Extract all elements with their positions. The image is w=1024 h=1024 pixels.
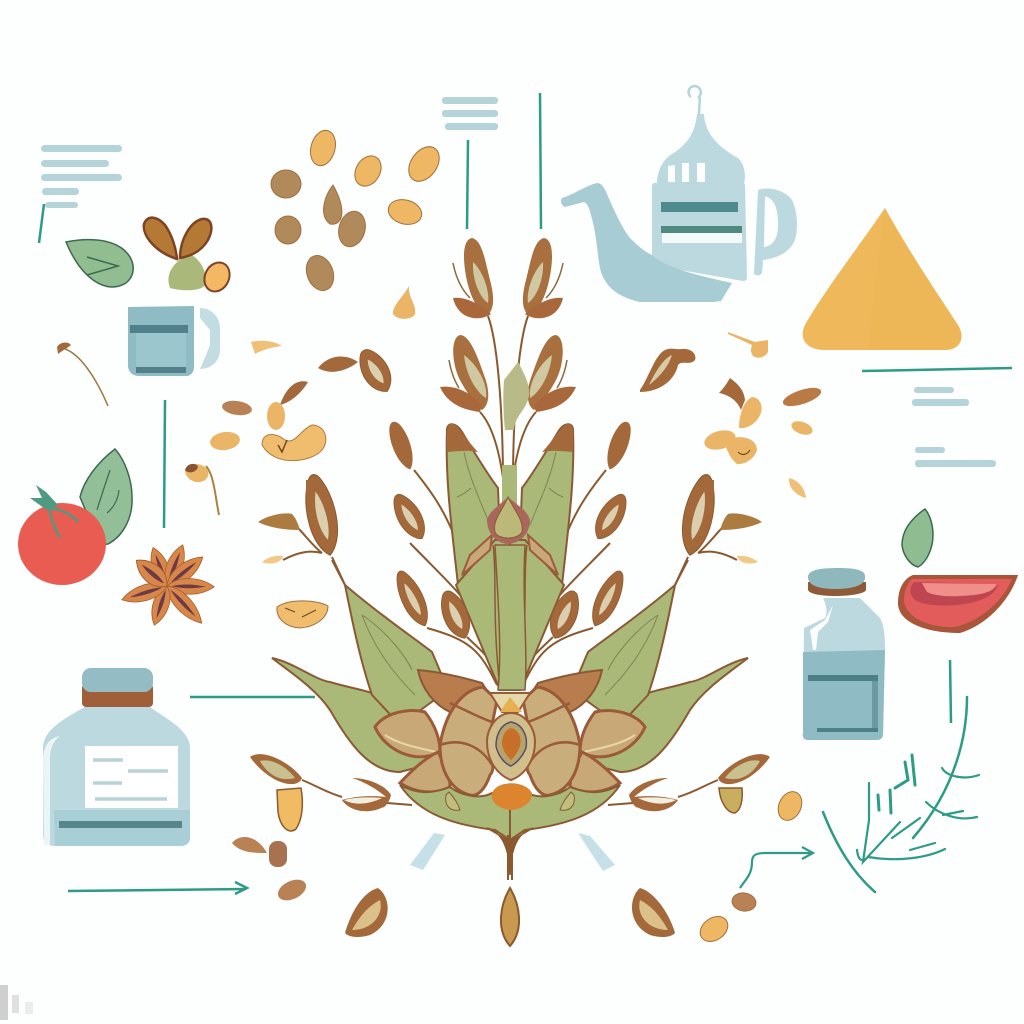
decorative corner artefact (0, 985, 33, 1020)
central plant: upper left buds (440, 238, 503, 478)
teapot spout (561, 183, 732, 302)
right jar (803, 568, 885, 740)
teapot handle (754, 188, 797, 275)
arrow: bottom right (740, 847, 813, 888)
icon: green leaf top left (66, 240, 133, 287)
yellow pyramid (803, 208, 962, 350)
teapot hook (689, 86, 701, 114)
connector line: right (950, 660, 951, 723)
connector line left (164, 400, 165, 528)
arrow: bottom left (68, 882, 247, 894)
scattered seeds: left (209, 286, 415, 461)
bottom seed row (345, 888, 675, 946)
central plant: end tongues (277, 788, 742, 831)
central plant: centre details (487, 362, 535, 810)
icon: star anise (120, 542, 214, 629)
text block placeholder: top left (39, 145, 122, 243)
teapot body (652, 183, 747, 281)
icon: leaf behind tomato (80, 449, 132, 545)
icon: tomato (18, 485, 106, 585)
central plant: upper right buds (513, 238, 576, 478)
central plant: left half (250, 419, 512, 880)
connector line: left jar to plant (190, 696, 315, 698)
green leaf above bowl (902, 509, 933, 567)
icon: yellow seed (277, 601, 328, 628)
connector line right (862, 368, 1012, 371)
teapot (561, 86, 797, 302)
seed cluster: top (271, 128, 446, 294)
pale blue rays (410, 833, 615, 871)
herb sprig (823, 697, 979, 892)
connector lines top (467, 93, 541, 229)
text block placeholder: right (912, 387, 996, 467)
central plant: right half (508, 419, 770, 880)
left jar (43, 668, 190, 846)
seeds: bottom right (695, 788, 806, 947)
icon: blue mug (128, 306, 220, 376)
icon: small mushroom stem (185, 464, 219, 515)
red bowl (898, 575, 1018, 633)
scattered seeds: right (640, 332, 823, 498)
icon: sprout with brown leaves (144, 218, 234, 296)
teapot lid (657, 114, 745, 184)
text block placeholder: top centre (442, 97, 498, 130)
icon: small stem with cap (57, 343, 108, 406)
seeds: bottom left (232, 837, 309, 904)
